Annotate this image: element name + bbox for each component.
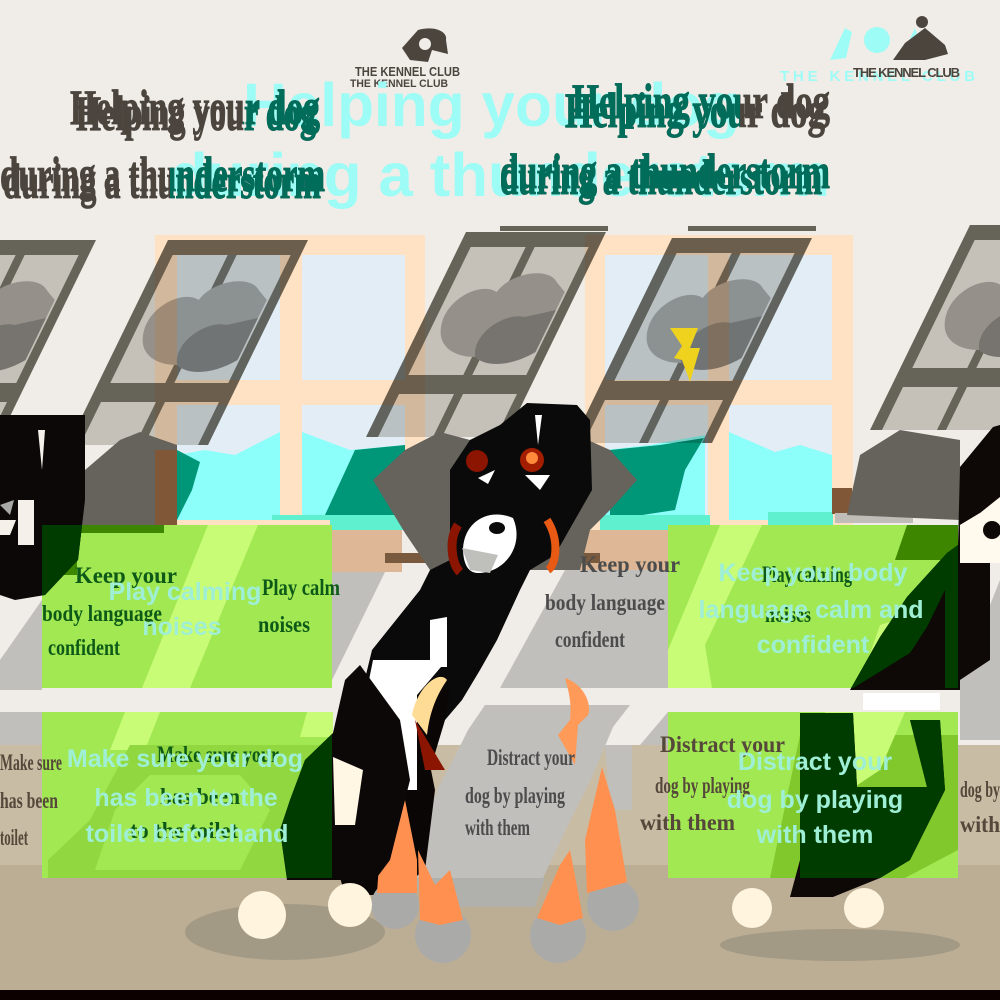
dog: orange legs and gray paws — [371, 678, 639, 963]
dog: center — [333, 403, 592, 895]
title: during a thunderstorm — [170, 141, 830, 209]
glitched tip text: noises — [765, 602, 811, 627]
glitched tip text: Distract your — [660, 732, 785, 757]
heading overlap tint: Helping your dog — [565, 82, 825, 138]
glitched tip text: confident — [555, 627, 625, 652]
window sills — [272, 488, 913, 572]
tip labels: Distract your — [738, 748, 892, 776]
tip labels: confident — [757, 631, 870, 659]
tip labels: noises — [142, 613, 222, 641]
gray mountains — [50, 430, 960, 570]
glitched heading: right: Helping your dog — [565, 82, 825, 138]
gray stair panels — [0, 570, 1000, 878]
logo: left: THE KENNEL CLUB — [355, 64, 460, 79]
glitched heading: right: during a thunderstorm — [500, 149, 822, 205]
lightning bolt — [670, 328, 700, 382]
glitched tip text: confident — [48, 635, 120, 660]
glitched tip text: Keep your — [75, 563, 177, 588]
glitched tip text: Play calming — [762, 562, 852, 587]
logo: right: THE KENNEL CLUB — [853, 65, 960, 80]
heading overlap tint: during a thunderstorm — [500, 143, 830, 199]
mountain edge on window frame — [155, 450, 177, 525]
glitched heading: left: Helping your dog — [76, 85, 316, 141]
tip labels — [67, 559, 924, 849]
window right — [585, 235, 853, 530]
glitched tip text: with them — [640, 810, 735, 835]
tip labels: Play calming — [109, 578, 261, 606]
glitched tip text: toilet — [0, 825, 28, 850]
logo: left: THE KENNEL CLUB — [350, 78, 448, 90]
glitched tip text: dog by playing — [655, 773, 750, 798]
glitched tip text: has been — [160, 784, 240, 809]
glitched heading: left: during a thunderstorm — [0, 146, 325, 202]
panel: play calming noises — [42, 525, 332, 688]
panel: distract your dog — [668, 712, 958, 878]
glitched tip text: noises — [258, 612, 310, 637]
tip labels: Keep your body — [719, 559, 908, 587]
glitched heading: left — [0, 79, 325, 209]
glitched heading: left: Helping your dog — [70, 79, 320, 135]
tip labels: dog by playing — [727, 786, 903, 814]
panel: make sure your dog has been to the toilet — [42, 712, 333, 878]
window left — [155, 235, 425, 530]
heading overlap tint: Helping your dog — [70, 79, 320, 135]
panel: keep your body language calm — [668, 525, 958, 688]
heading overlap tint: during a thunderstorm — [3, 153, 321, 209]
glitched tip text: to the toilet — [130, 818, 238, 843]
logo: right: THE KENNEL CLUB — [780, 68, 975, 85]
title: Helping your dog — [243, 71, 740, 139]
tip labels: language calm and — [698, 596, 924, 624]
title — [170, 71, 830, 209]
glitched heading: left: during a thunderstorm — [3, 153, 321, 209]
under-panel shade — [400, 878, 545, 907]
logo: left — [350, 28, 460, 90]
heading overlap tint — [170, 83, 830, 205]
dog fur over panels — [42, 525, 958, 878]
glitched tip text: Make sure your — [157, 742, 279, 767]
dog: left lower — [238, 665, 410, 939]
tip labels: toilet beforehand — [86, 820, 288, 848]
floor — [0, 745, 1000, 1000]
glitched heading: right: Helping your dog — [572, 73, 830, 129]
heading overlap tint: during a thunderstorm — [0, 146, 325, 202]
glitched tip text: Distract your — [487, 745, 575, 770]
dog: right edge — [732, 425, 1000, 928]
glitched tip text — [0, 552, 1000, 850]
logo: right — [780, 16, 975, 85]
glitched tip text: body language — [545, 590, 665, 615]
heading overlap tint: Helping your dog — [76, 85, 316, 141]
tip labels: with them — [756, 821, 873, 849]
glitched tip text: has been — [0, 788, 58, 813]
skewed storm windows — [0, 225, 1000, 445]
glitched heading: right — [500, 73, 830, 205]
heading overlap tint: during a thunderstorm — [500, 149, 822, 205]
dog: left edge — [0, 415, 85, 600]
glitched tip text: body language — [42, 601, 162, 626]
glitched tip text: Play calm — [262, 575, 340, 600]
heading overlap tint: Helping your dog — [572, 73, 830, 129]
glitched tip text: with them — [465, 815, 530, 840]
glitched tip text: Keep your — [580, 552, 680, 577]
glitched tip text: Make sure — [0, 750, 62, 775]
floor shadows — [185, 904, 960, 961]
tip labels: has been to the — [94, 784, 278, 812]
glitched tip text: dog by playing — [465, 783, 565, 808]
glitched heading: right: during a thunderstorm — [500, 143, 830, 199]
tip labels: Make sure your dog — [67, 745, 303, 773]
